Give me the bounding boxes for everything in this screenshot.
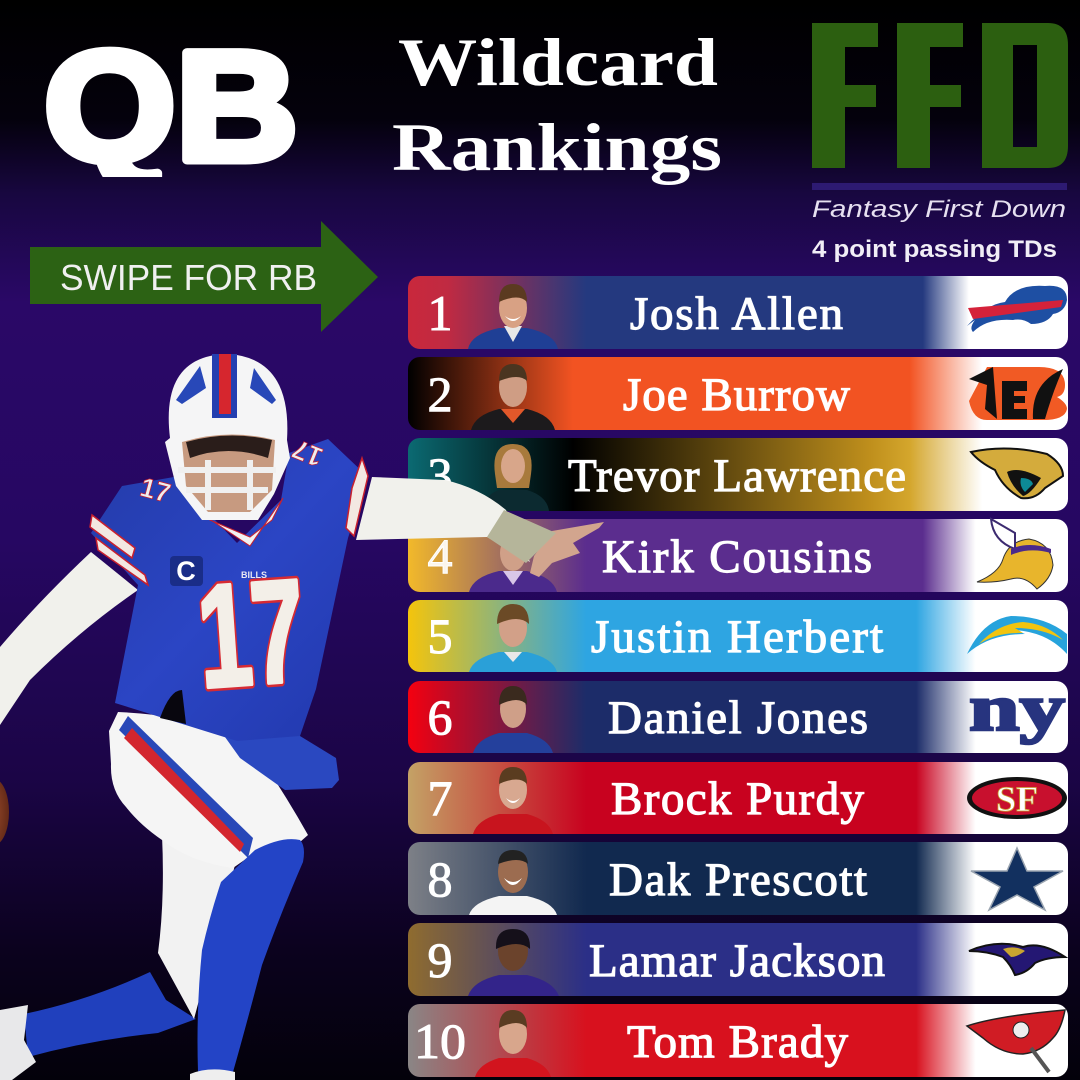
jersey <box>91 439 368 741</box>
ranking row 5: Justin Herbert: Justin Herbert <box>591 611 883 663</box>
logo: Jaguars <box>971 448 1063 498</box>
logo: Buccaneers <box>967 1010 1065 1072</box>
ranking row 6: Daniel Jones: 6 <box>428 689 452 745</box>
portrait: Daniel Jones <box>473 686 553 753</box>
ranking row 4: Kirk Cousins: 4 <box>428 528 452 584</box>
ranking row 6: Daniel Jones: Daniel Jones <box>608 692 868 744</box>
logo: Bills <box>967 286 1067 332</box>
ranking row 8: Dak Prescott <box>408 842 1068 915</box>
right arm sleeve <box>356 477 530 562</box>
note: scoring format: 4 point passing TDs <box>812 236 1057 263</box>
captain patch <box>170 556 203 586</box>
heading: Wildcard Rankings <box>392 24 722 185</box>
title: QB: QB <box>44 20 298 194</box>
logo: 49ers <box>967 777 1067 819</box>
ranking row 3: Trevor Lawrence <box>408 438 1068 511</box>
logo: Ravens <box>969 944 1065 975</box>
ranking row 10: Tom Brady: Tom Brady <box>627 1016 848 1068</box>
wrist band <box>487 510 556 563</box>
jersey pouch <box>220 730 339 790</box>
arrow: swipe for RB <box>30 221 378 332</box>
ranking row 8: Dak Prescott: Dak Prescott <box>609 854 867 906</box>
jersey number 17: 17 <box>193 548 310 718</box>
sleeve number: 17 <box>137 472 174 509</box>
logo: Cowboys <box>971 848 1063 910</box>
ranking row 2: Joe Burrow: 2 <box>428 366 452 422</box>
portrait: Justin Herbert <box>469 604 557 672</box>
Bills wordmark: BILLS <box>241 570 267 580</box>
collar <box>196 498 283 546</box>
portrait: Joe Burrow <box>471 364 555 430</box>
ranking row 6: Daniel Jones <box>408 672 1068 753</box>
ranking row 7: Brock Purdy <box>408 762 1068 834</box>
ranking row 4: Kirk Cousins <box>408 519 1068 592</box>
ranking row 1: Josh Allen: Josh Allen <box>630 288 843 340</box>
logo: Bengals <box>969 367 1067 420</box>
portrait: Lamar Jackson <box>468 929 559 996</box>
logo: Vikings <box>977 519 1053 589</box>
ranking row 7: Brock Purdy: 7 <box>428 770 452 826</box>
player: quarterback in blue Bills uniform: 17 <box>288 433 327 472</box>
rear shin <box>158 835 235 1019</box>
ranking row 1: Josh Allen: 1 <box>428 285 452 341</box>
arrow: swipe for RB: SWIPE FOR RB <box>60 257 317 298</box>
ranking row 4: Kirk Cousins: Kirk Cousins <box>602 531 872 583</box>
portrait: Kirk Cousins <box>469 535 557 592</box>
sleeve stripes <box>90 515 148 585</box>
ranking row 7: Brock Purdy: Brock Purdy <box>611 773 864 825</box>
ranking row 8: Dak Prescott: 8 <box>428 851 452 907</box>
ranking row 2: Joe Burrow <box>408 357 1068 430</box>
jersey number 17: 17 <box>193 548 310 718</box>
ranking row 9: Lamar Jackson: Lamar Jackson <box>589 935 885 987</box>
portrait: Dak Prescott <box>469 850 557 915</box>
portrait: Trevor Lawrence <box>483 444 549 511</box>
logo: Chargers <box>967 616 1067 654</box>
ranking row 9: Lamar Jackson <box>408 923 1068 996</box>
logo: FFD <box>812 23 1068 168</box>
ranking row 9: Lamar Jackson: 9 <box>428 932 452 988</box>
ranking row 1: Josh Allen <box>408 276 1068 349</box>
helmet <box>165 354 290 520</box>
thigh pants <box>109 712 308 868</box>
black towel <box>160 690 186 724</box>
heading: Wildcard Rankings: Wildcard <box>398 24 718 100</box>
back shoe <box>0 1005 36 1080</box>
tagline: Fantasy First Down: Fantasy First Down <box>812 196 1066 223</box>
ranking row 10: Tom Brady: 10 <box>414 1013 466 1069</box>
player: quarterback in blue Bills uniform <box>0 354 604 1080</box>
hand <box>530 522 604 577</box>
front leg <box>198 839 304 1072</box>
left arm <box>0 552 138 725</box>
jersey number 17 <box>193 548 310 718</box>
ranking row 3: Trevor Lawrence: 3 <box>428 447 452 503</box>
captain patch: C <box>176 556 196 586</box>
logo divider <box>812 183 1067 190</box>
pants stripe <box>119 716 253 858</box>
logo: 49ers: SF <box>996 779 1038 819</box>
portrait: Josh Allen <box>468 284 558 349</box>
portrait: Brock Purdy <box>473 767 553 834</box>
heading: Wildcard Rankings: Rankings <box>392 109 722 185</box>
ranking row 10: Tom Brady <box>408 1004 1068 1077</box>
football <box>0 779 9 845</box>
back leg <box>24 972 196 1057</box>
ranking row 2: Joe Burrow: Joe Burrow <box>623 369 850 421</box>
ranking row 5: Justin Herbert <box>408 600 1068 672</box>
ranking row 5: Justin Herbert: 5 <box>428 608 452 664</box>
portrait: Tom Brady <box>475 1010 551 1077</box>
front shoe <box>190 1069 235 1080</box>
ranking row 3: Trevor Lawrence: Trevor Lawrence <box>568 450 906 502</box>
logo: Giants: ny <box>969 672 1065 745</box>
